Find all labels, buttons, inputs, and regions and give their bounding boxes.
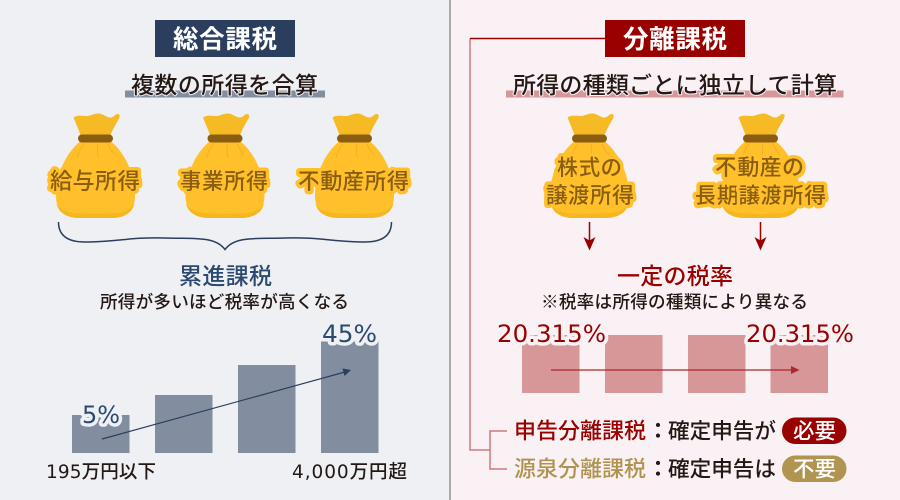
badge: 不要: 不要: [793, 452, 836, 484]
icon: money bag 不動産所得: 不動産所得: [298, 164, 409, 196]
icon: money bag 不動産の長期譲渡所得: 不動産の: [715, 150, 804, 182]
subheading: 所得の種類ごとに独立して計算: 所得の種類ごとに独立して計算: [513, 66, 837, 100]
arrow: flat rate: [551, 366, 800, 374]
panel: 総合課税: [0, 0, 449, 500]
row: 申告分離課税: [514, 414, 846, 446]
connector lines: [470, 38, 606, 469]
icon: money bag 事業所得: [180, 113, 268, 218]
heading: 分離課税: 分離課税: [623, 19, 727, 56]
icon: money bag 株式の譲渡所得: 譲渡所得: [546, 178, 634, 210]
row: 源泉分離課税: [514, 452, 846, 484]
label: 195万円以下: 195万円以下: [46, 458, 156, 484]
label: 4,000万円超: 4,000万円超: [292, 458, 407, 484]
badge: 不要: [782, 452, 846, 484]
icon: money bag 不動産所得: [298, 113, 409, 218]
icon: money bag 事業所得: 事業所得: [180, 164, 268, 196]
row: 源泉分離課税: 源泉分離課税: [514, 452, 646, 484]
row: 源泉分離課税: 確定申告は: [668, 452, 776, 484]
label: 20.315% left: 20.315%: [497, 320, 606, 348]
row: 申告分離課税: ：: [647, 414, 669, 446]
icon: money bag 不動産の長期譲渡所得: 長期譲渡所得: [695, 179, 826, 210]
arrow: down left: [584, 222, 596, 250]
row: 申告分離課税: 確定申告が: [668, 414, 776, 446]
subheading: 複数の所得を合算: 複数の所得を合算: [131, 66, 318, 100]
heading: 累進課税: 累進課税: [179, 257, 272, 291]
arrow: down right: [754, 222, 766, 250]
label: 5%: 5%: [82, 401, 120, 429]
heading: 一定の税率: 一定の税率: [617, 257, 733, 291]
brace: [58, 222, 392, 250]
icon: money bag 不動産の長期譲渡所得: [695, 113, 826, 218]
row: 源泉分離課税: ：: [647, 452, 669, 484]
text: 所得が多いほど税率が高くなる: 所得が多いほど税率が高くなる: [100, 289, 349, 314]
label: 45%: 45%: [322, 320, 377, 348]
panel: 分離課税: [449, 0, 900, 500]
icon: money bag 株式の譲渡所得: [546, 113, 634, 218]
icon: money bag 給与所得: [50, 113, 140, 218]
badge: 必要: 必要: [793, 414, 836, 446]
bar chart: 一定の税率: [497, 320, 854, 393]
row: 申告分離課税: 申告分離課税: [514, 414, 646, 446]
bar chart: 累進課税: [72, 320, 378, 453]
label: 20.315% right: 20.315%: [746, 320, 854, 348]
text: ※税率は所得の種類により異なる: ※税率は所得の種類により異なる: [541, 289, 808, 314]
arrow: rising rate: [102, 368, 351, 439]
icon: money bag 株式の譲渡所得: 株式の: [557, 151, 622, 182]
badge: 必要: [782, 414, 846, 446]
icon: money bag 給与所得: 給与所得: [50, 164, 140, 196]
heading: 総合課税: 総合課税: [173, 19, 277, 56]
